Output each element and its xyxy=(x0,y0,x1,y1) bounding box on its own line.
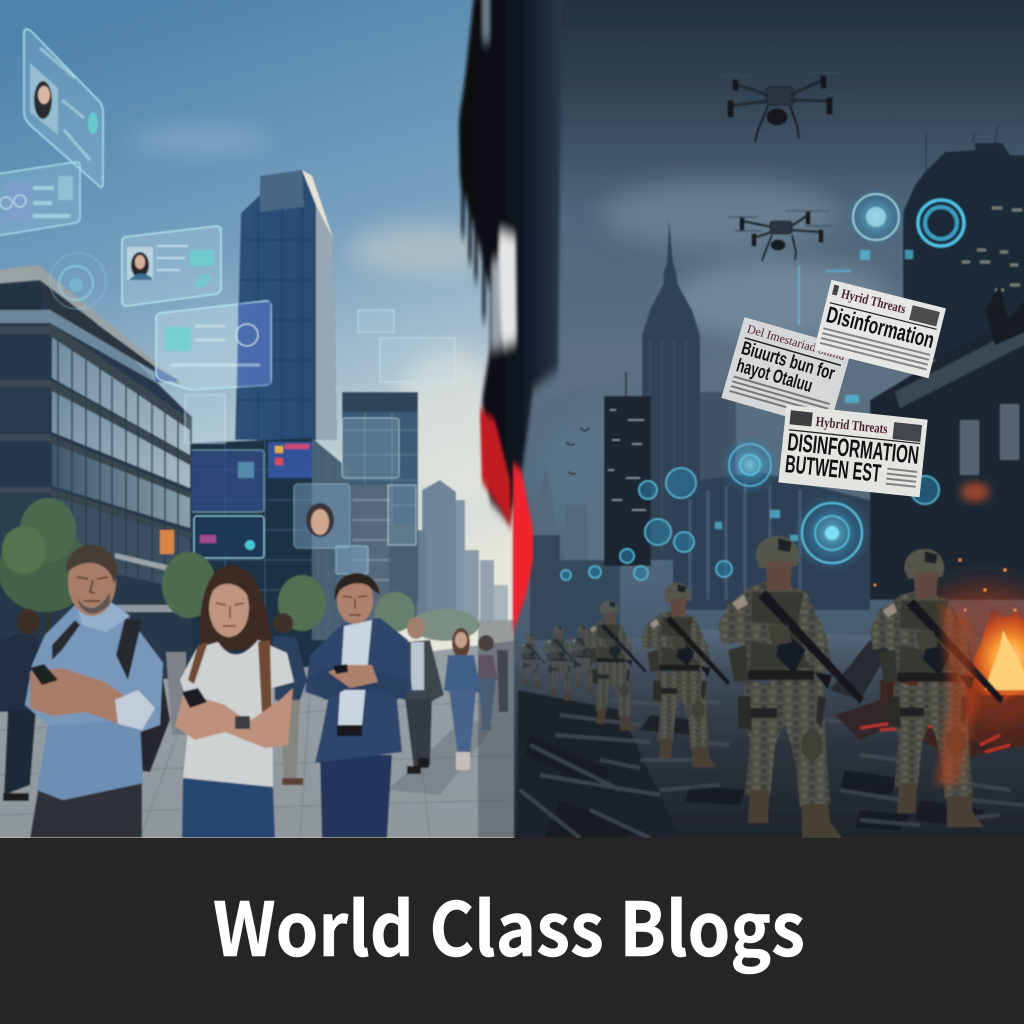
newspaper: top right: Disinformation xyxy=(824,301,937,353)
data flecks xyxy=(715,250,913,541)
soldier: front centre xyxy=(718,536,864,838)
newspaper: left xyxy=(721,317,852,429)
seam haze on pavement xyxy=(478,620,520,838)
holographic panels xyxy=(0,29,455,545)
birds xyxy=(566,428,590,474)
HUD rings xyxy=(561,187,964,613)
scene: conflict city (right half) xyxy=(514,0,1024,840)
ruined colonnade xyxy=(673,285,1024,610)
hologram: portrait card xyxy=(122,226,221,306)
newspaper: front xyxy=(778,405,928,497)
storm clouds xyxy=(530,180,890,550)
tower: central glass skyscraper xyxy=(235,170,337,440)
skyline: right tower xyxy=(903,125,1024,360)
ground and rubble xyxy=(515,630,1024,838)
soldier: front right xyxy=(870,549,1004,827)
person: woman in mauve xyxy=(478,635,498,730)
fire light on soldier xyxy=(935,600,978,785)
person: businessman in grey xyxy=(405,617,444,774)
distant towers: left xyxy=(390,480,508,620)
embers xyxy=(874,558,1016,612)
hologram: tall profile card xyxy=(24,29,103,187)
soldiers: far squad xyxy=(519,625,601,700)
newspaper: front: BUTWEN EST xyxy=(784,450,882,488)
clouds xyxy=(130,130,510,510)
skyline: dark block xyxy=(604,372,651,566)
title: World Class Blogs xyxy=(213,871,805,978)
trees xyxy=(0,498,479,660)
drone: lower xyxy=(728,211,832,261)
fire xyxy=(905,482,1024,725)
hologram: large data card over tower xyxy=(156,301,271,390)
hologram: ring over building xyxy=(50,253,106,309)
newspaper: top right: Hyrid Threats xyxy=(840,286,907,316)
ring: top right pair xyxy=(846,187,964,247)
soldier: third xyxy=(641,583,730,767)
building: mid tower xyxy=(342,392,418,625)
person: man in navy suit with phone xyxy=(305,573,412,838)
building: low glass block with screens xyxy=(190,438,368,680)
hologram: metrics card xyxy=(0,162,80,237)
soldier: fourth xyxy=(584,600,647,730)
drone: upper xyxy=(715,73,858,142)
red glitch band xyxy=(480,408,533,632)
person: man with backpack and phone xyxy=(25,545,170,838)
person: woman in denim xyxy=(444,628,481,770)
side face rows xyxy=(52,336,190,455)
glass balcony xyxy=(0,310,160,385)
background pedestrians xyxy=(0,609,508,801)
front face rows xyxy=(0,335,48,378)
rings: small scatter xyxy=(561,468,939,613)
ring: large mid xyxy=(720,435,872,573)
person: far left businessman xyxy=(0,609,42,801)
newspaper: front: Hybrid Threats xyxy=(815,415,889,437)
newspaper: left: hayot Otaluu xyxy=(734,355,815,397)
title band xyxy=(0,838,1024,1024)
hologram: faint panels on the right xyxy=(185,310,455,545)
sky: right xyxy=(514,0,1024,840)
person: navy coat behind woman xyxy=(273,613,307,785)
soldier: small far left xyxy=(519,633,546,688)
newspaper: left: Del Imestariad ohmu xyxy=(746,322,847,363)
newspaper: top right xyxy=(814,280,946,378)
soldier: small behind xyxy=(569,626,601,692)
newspaper: left: Biuurts bun for xyxy=(739,338,837,385)
glitch seam between the halves xyxy=(459,0,562,632)
pavement xyxy=(0,640,520,838)
roof xyxy=(0,265,182,385)
person: grey coat behind xyxy=(166,652,186,735)
soldier: fifth xyxy=(544,625,580,700)
scene: civilian city (left half) xyxy=(0,0,530,840)
newspaper: front: DISINFORMATION xyxy=(786,428,920,470)
building: left office block xyxy=(0,265,192,690)
sky: left xyxy=(0,0,530,840)
person: woman in white tee with phone xyxy=(175,565,294,838)
skyline: spire tower xyxy=(530,220,736,640)
person: farthest walker xyxy=(497,650,508,712)
